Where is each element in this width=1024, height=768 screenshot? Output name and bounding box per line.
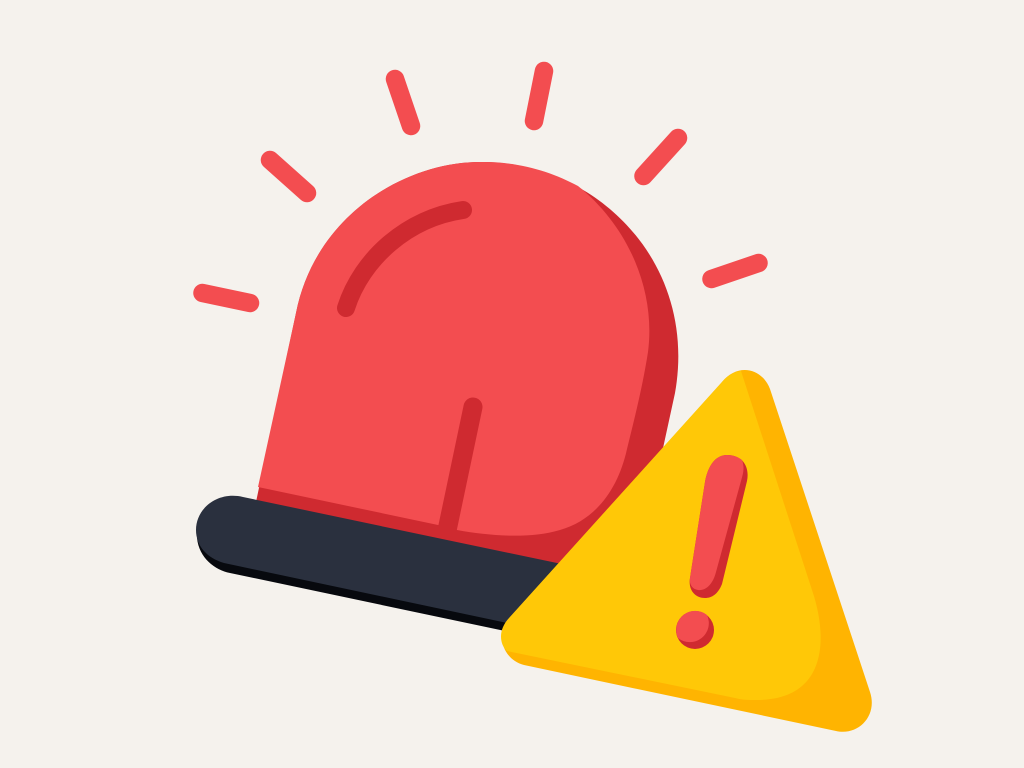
dome shadow side bbox=[256, 162, 678, 600]
exclamation mark bbox=[676, 455, 748, 649]
base shadow bbox=[197, 530, 560, 631]
icon: warning triangle bbox=[501, 370, 872, 732]
dome highlight arc bbox=[346, 210, 463, 308]
triangle main face bbox=[501, 371, 821, 700]
exclamation dot bbox=[676, 611, 709, 642]
exclamation bar bbox=[690, 455, 744, 590]
dome centre seam bbox=[445, 407, 473, 540]
icon: siren base bbox=[196, 496, 600, 631]
triangle shadow side bbox=[502, 370, 872, 732]
icon: light rays bbox=[202, 71, 758, 303]
icon: siren dome bbox=[256, 162, 678, 600]
exclamation dot shadow bbox=[676, 611, 714, 649]
dome main face bbox=[258, 162, 649, 536]
exclamation bar shadow bbox=[690, 455, 748, 598]
base main bbox=[196, 496, 600, 630]
